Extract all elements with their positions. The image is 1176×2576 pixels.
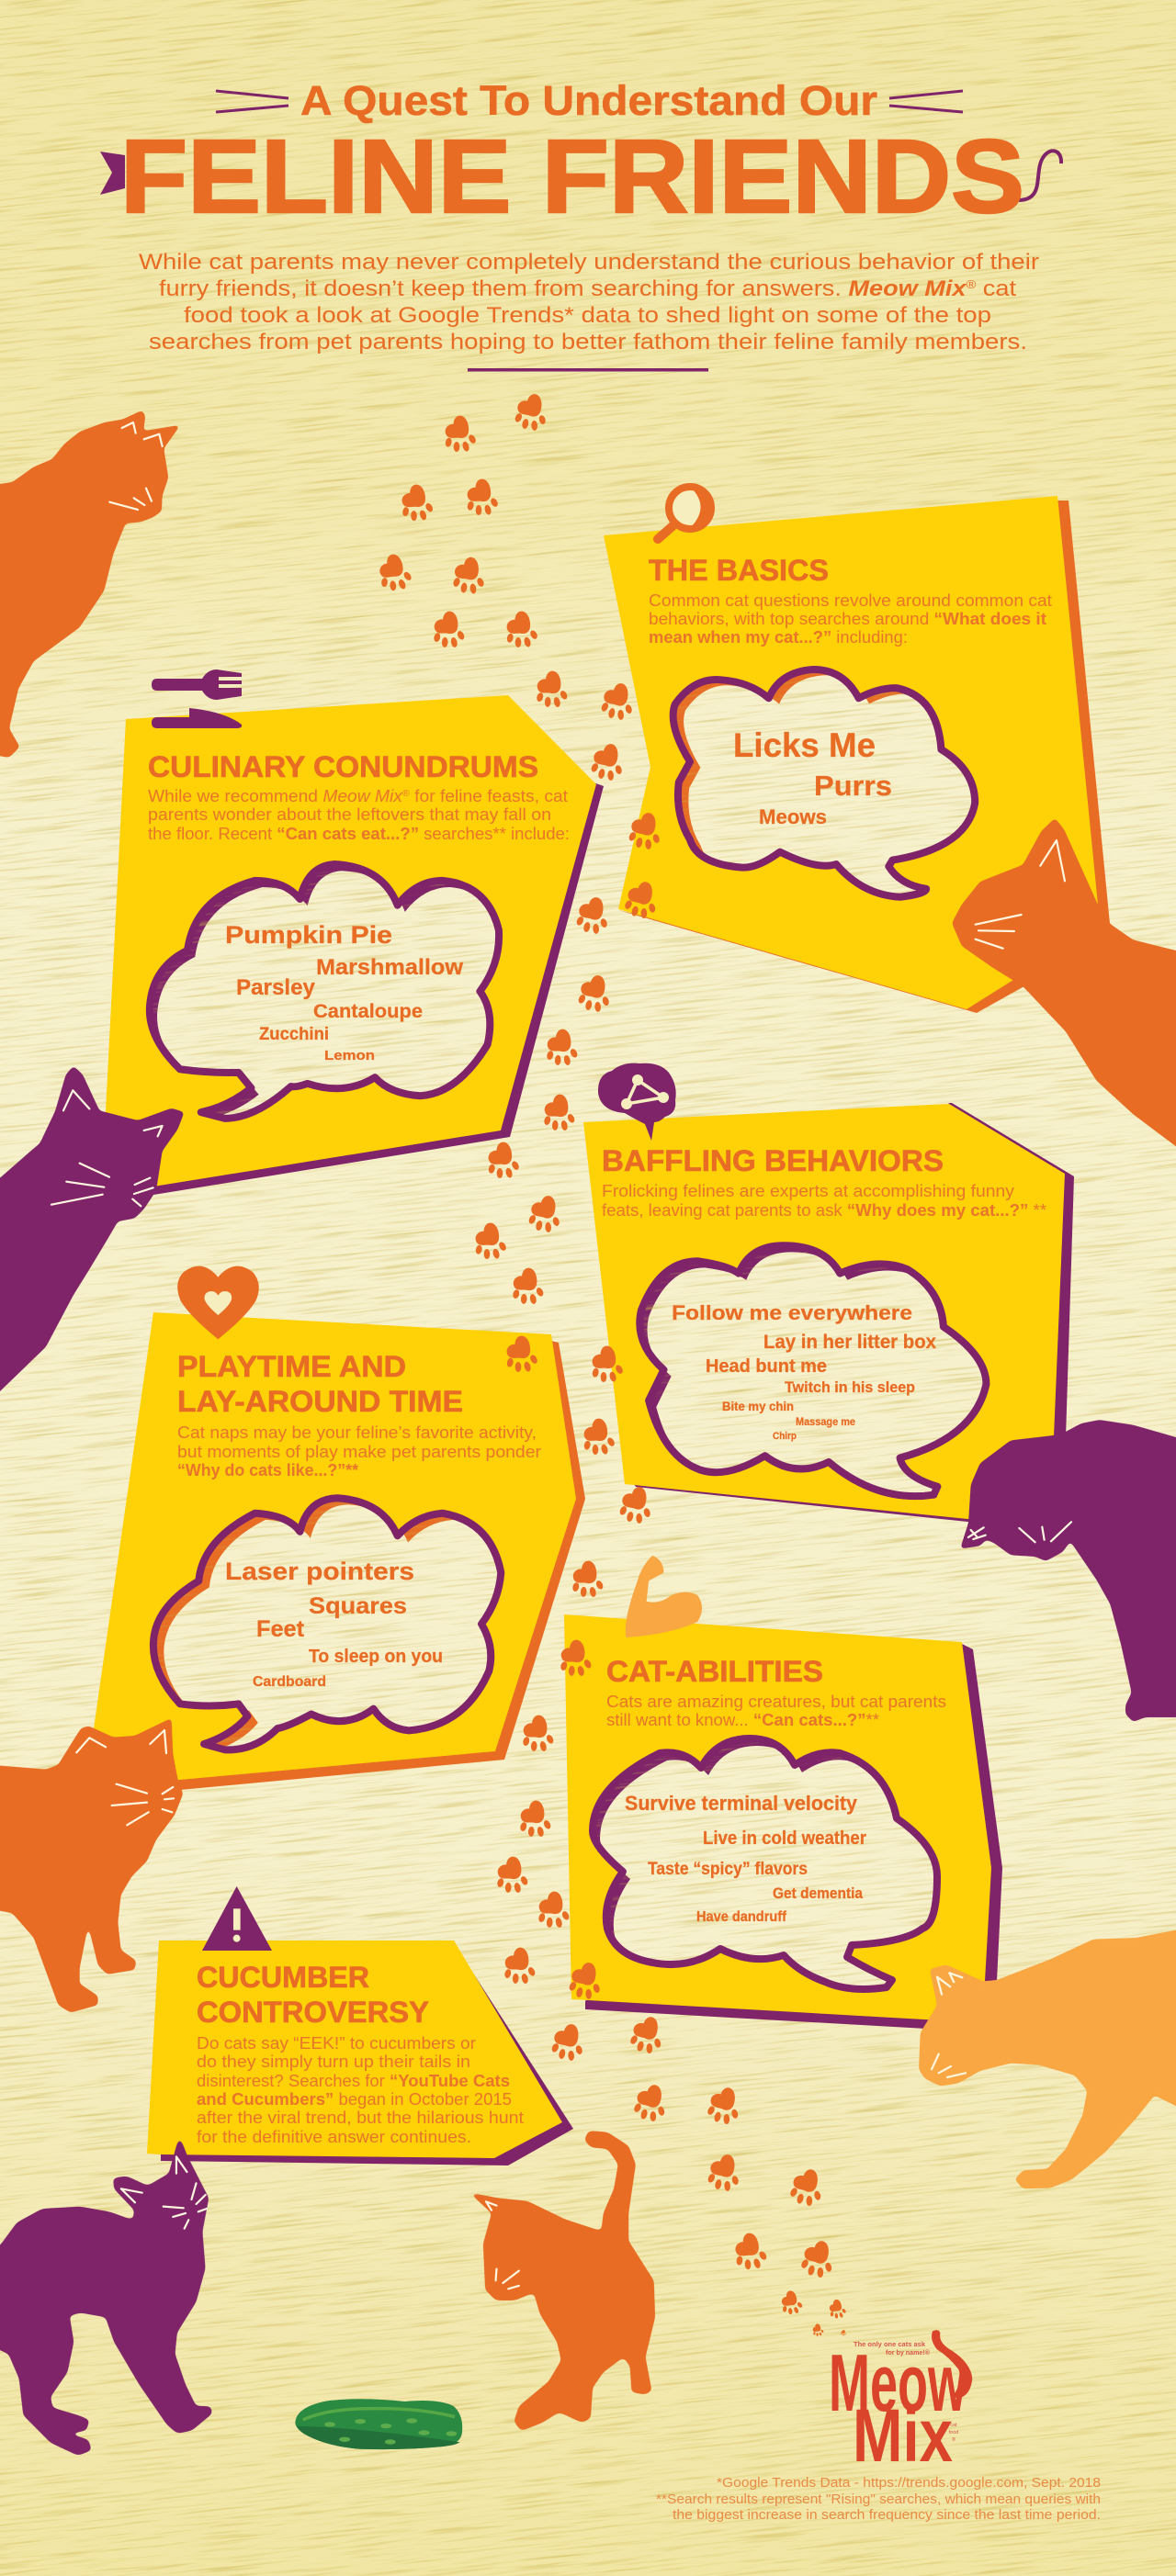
description: for feline feasts, cat [410, 787, 568, 805]
icon: warning triangle [202, 1886, 272, 1951]
title block [100, 77, 1061, 234]
description [197, 2034, 524, 2146]
description: feats, leaving cat parents to ask “Why does my cat...?” ** [602, 1201, 1046, 1220]
speech bubble [142, 859, 506, 1125]
bubble words: Twitch in his sleep [785, 1378, 915, 1396]
description: “Why do cats like...?”** [177, 1461, 358, 1479]
description [177, 1423, 541, 1479]
panel: culinary conundrums [101, 695, 604, 1195]
bubble words: Get dementia [773, 1884, 863, 1902]
panel: cat-abilities [564, 1614, 1002, 2030]
bubble words: Parsley [236, 975, 316, 1000]
cat: orange right [952, 818, 1176, 1176]
cat: orange top left [0, 411, 181, 758]
description: after the viral trend, but the hilarious hunt [197, 2109, 524, 2127]
bubble words: Chirp [773, 1431, 797, 1442]
description [602, 1182, 1046, 1220]
cat: purple bottom left [0, 2135, 212, 2456]
description [606, 1693, 946, 1729]
bubble words: Lemon [324, 1048, 375, 1063]
cat food mark: cat [950, 2423, 957, 2428]
logo: Meow Mix [829, 2330, 972, 2478]
icon: fork and knife [152, 669, 242, 728]
bubble words: Live in cold weather [703, 1828, 866, 1849]
bubble words: Bite my chin [722, 1399, 794, 1413]
bubble words: Pumpkin Pie [225, 921, 392, 949]
bubble words: Licks Me [733, 726, 876, 764]
bubble words: Cardboard [253, 1674, 326, 1690]
bubble words: Feet [256, 1616, 305, 1642]
description: Cats are amazing creatures, but cat parents [606, 1693, 946, 1711]
panel: playtime and lay-around time [94, 1312, 585, 1790]
speech bubble [671, 661, 986, 905]
panel: baffling behaviors [583, 1103, 1074, 1524]
description: Cat naps may be your feline’s favorite activity, [177, 1423, 537, 1442]
bubble words: Follow me everywhere [672, 1301, 912, 1324]
heading [197, 1961, 429, 2029]
description: ® [402, 789, 410, 799]
bubble words: Head bunt me [706, 1356, 827, 1377]
speech bubble [588, 1736, 944, 1997]
icon: flexed arm [626, 1556, 702, 1637]
description: still want to know... “Can cats...?”** [606, 1711, 879, 1729]
description: the floor. Recent “Can cats eat...?” searches** include: [148, 825, 570, 843]
bubble words: Lay in her litter box [763, 1332, 936, 1353]
cat: purple left [0, 1066, 185, 1408]
description: disinterest? Searches for “YouTube Cats [197, 2072, 510, 2090]
panel: the basics [604, 496, 1110, 1013]
footnotes: *Google Trends Data - https://trends.google.com, Sept. 2018 [717, 2475, 1101, 2491]
bubble words: Cantaloupe [313, 1001, 423, 1022]
intro paragraph [139, 250, 1039, 354]
footnotes [656, 2475, 1101, 2523]
bubble words: To sleep on you [309, 1647, 443, 1667]
intro paragraph: furry friends, it doesn’t keep them from searching for answers. Meow Mix [159, 276, 953, 301]
icon: magnifying glass [658, 487, 711, 539]
description: While we recommend Meow Mix [148, 787, 397, 805]
logo: Meow Mix: for by name!® [886, 2348, 930, 2357]
heading: LAY-AROUND TIME [177, 1385, 463, 1418]
footnotes: the biggest increase in search frequency since the last time period. [673, 2507, 1101, 2523]
bubble words [625, 1792, 866, 1925]
bubble words: Laser pointers [225, 1558, 414, 1585]
intro paragraph: ® [966, 277, 977, 291]
icon: cucumber [295, 2399, 462, 2449]
bubble words [672, 1301, 936, 1442]
intro paragraph: searches from pet parents hoping to better fathom their feline family members. [149, 330, 1027, 354]
description: Common cat questions revolve around common cat [649, 591, 1052, 610]
bubble words: Survive terminal velocity [625, 1792, 858, 1815]
intro paragraph: cat [976, 276, 1016, 301]
bubble words: Massage me [796, 1415, 855, 1428]
divider [468, 368, 708, 371]
description: Frolicking felines are experts at accomplishing funny [602, 1182, 1014, 1200]
description: and Cucumbers” began in October 2015 [197, 2090, 512, 2109]
heading: BAFFLING BEHAVIORS [602, 1144, 944, 1177]
purple tail [1018, 151, 1061, 200]
panel: cucumber controversy [147, 1940, 573, 2165]
heading [177, 1350, 463, 1418]
purple ribbon [100, 152, 125, 195]
footnotes: **Search results represent "Rising" searches, which mean queries with [656, 2492, 1101, 2507]
heading: THE BASICS [649, 554, 829, 587]
heading: CUCUMBER [197, 1961, 369, 1994]
cat: light orange right [919, 1927, 1176, 2188]
intro paragraph: food took a look at Google Trends* data to shed light on some of the top [184, 303, 991, 328]
logo: Meow Mix: Mix [853, 2394, 953, 2478]
description [148, 787, 570, 843]
description: but moments of play make pet parents ponder [177, 1443, 541, 1461]
cat food mark [949, 2423, 958, 2443]
bubble words [225, 921, 463, 1063]
bubble words: Squares [309, 1593, 407, 1619]
cat: orange left [0, 1718, 183, 2013]
icon: brain with network [598, 1063, 676, 1141]
logo tail [932, 2330, 972, 2399]
description: behaviors, with top searches around “What does it [649, 610, 1046, 628]
bubble words: Taste “spicy” flavors [648, 1860, 808, 1879]
icon: heart [177, 1266, 259, 1339]
intro paragraph: While cat parents may never completely understand the curious behavior of their [139, 250, 1039, 275]
cat food mark: food [949, 2430, 958, 2435]
heading: CAT-ABILITIES [606, 1655, 823, 1688]
heading: CULINARY CONUNDRUMS [148, 750, 538, 783]
bubble words: Meows [759, 805, 827, 828]
bubble words: Marshmallow [316, 955, 463, 980]
heading line two: FELINE FRIENDS [120, 118, 1024, 234]
heading line one: A Quest To Understand Our [300, 77, 877, 124]
heading: CONTROVERSY [197, 1996, 429, 2029]
cat: purple right [960, 1420, 1176, 1722]
description [649, 591, 1052, 647]
heading: PLAYTIME AND [177, 1350, 406, 1383]
cat: orange bottom center [469, 2131, 655, 2431]
description: do they simply turn up their tails in [197, 2053, 470, 2071]
bubble words: Purrs [814, 770, 892, 802]
bubble words [733, 726, 892, 828]
cat food mark: ® [952, 2436, 956, 2443]
paw print trail [374, 392, 848, 2337]
description: mean when my cat...?” including: [649, 628, 908, 647]
speech bubble [634, 1235, 994, 1502]
whiskers right of heading [889, 91, 963, 112]
description: parents wonder about the leftovers that may fall on [148, 805, 551, 824]
speech bubble [142, 1492, 512, 1757]
tagline: The only one cats ask [854, 2340, 926, 2348]
bubble words: Zucchini [259, 1025, 329, 1044]
logo wordmark: Meow [829, 2337, 967, 2428]
whiskers left of heading [216, 91, 288, 112]
bubble words: Have dandruff [696, 1909, 787, 1925]
bubble words [225, 1558, 443, 1690]
description: Do cats say “EEK!” to cucumbers or [197, 2034, 476, 2053]
description: for the definitive answer continues. [197, 2128, 471, 2146]
